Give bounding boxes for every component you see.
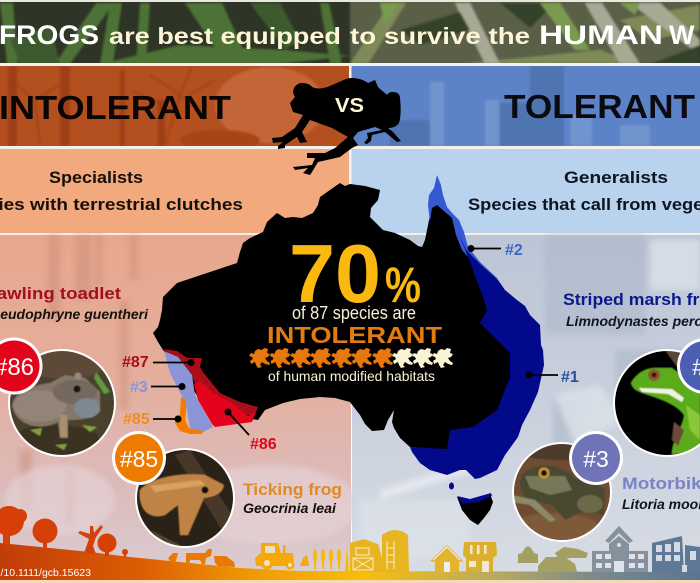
callouts: map labels left: #85 — [123, 411, 150, 428]
callouts: map labels right: #2 — [505, 242, 523, 259]
photo: crawling toadlet — [8, 349, 116, 457]
heading: tolerant: TOLERANT — [504, 88, 695, 125]
map: Tasmania — [457, 494, 493, 525]
landscape strip: land use gradient — [0, 506, 700, 583]
panel: generalists — [351, 149, 700, 233]
callouts: map labels left — [122, 354, 277, 453]
text: striped marsh frog — [563, 290, 700, 329]
map: south-west range 86 — [194, 381, 256, 427]
photo: ticking frog — [135, 448, 235, 550]
map: south-west range 85 — [175, 397, 203, 434]
panel: specialists — [0, 149, 349, 233]
icons: house and shop — [430, 542, 497, 572]
text: specialists description: Specialists — [49, 168, 143, 187]
title: HUMAN — [539, 20, 663, 50]
stat: 70 percent: 70 — [289, 227, 381, 320]
title: W — [669, 20, 695, 50]
text: generalists description — [468, 168, 700, 214]
panel: intolerant habitat background — [0, 235, 360, 583]
heading: intolerant: INTOLERANT — [0, 89, 231, 126]
icon: frog silhouette vs — [272, 78, 401, 175]
text: of 87 species are: of 87 species are — [292, 303, 416, 323]
map: generalist range light blue — [428, 175, 498, 281]
panel: tolerant habitat background — [352, 235, 700, 583]
text: crawling toadlet — [0, 284, 149, 322]
badge: rank 3 — [569, 431, 623, 485]
icons: wheat field — [313, 546, 349, 571]
text: specialists description — [0, 168, 243, 214]
photo: motorbike frog — [510, 440, 612, 543]
icons: tractor — [255, 543, 309, 570]
map: south-west range 87 — [163, 349, 258, 415]
text: vs: VS — [335, 95, 364, 117]
map: south-west range 3 — [164, 351, 213, 432]
map: range of species 1 dark blue — [410, 232, 544, 479]
title: FROGS — [0, 20, 99, 50]
badge: rank 3: #3 — [583, 446, 609, 472]
title: to survive the — [350, 23, 530, 49]
callouts: map labels left: #86 — [250, 436, 277, 453]
icons: vehicles — [518, 546, 588, 572]
text: intolerant orange: INTOLERANT — [267, 322, 442, 348]
badge: rank 85: #85 — [120, 446, 158, 472]
photo: striped marsh frog — [610, 348, 700, 458]
icons: frog pictogram row — [249, 348, 453, 368]
text: ticking frog — [243, 480, 342, 516]
text: of human modified habitats: of human modified habitats — [268, 368, 435, 384]
title: are best equipped — [109, 23, 341, 49]
badge: rank 86 — [0, 338, 42, 394]
icons: farm animals — [168, 549, 235, 567]
stat: 70 percent — [249, 227, 453, 384]
callouts: map labels left: #3 — [130, 379, 148, 396]
text: ticking frog: Geocrinia leai — [243, 500, 337, 516]
icons: trees — [0, 506, 128, 558]
callouts: map labels right: #1 — [561, 369, 579, 386]
icons: school building — [592, 526, 648, 572]
stat: 70 percent: % — [385, 257, 421, 313]
text: motorbike frog — [622, 474, 700, 512]
text: generalists description: Generalists — [564, 168, 668, 187]
icons: barn and silo — [350, 530, 409, 572]
callouts: map labels right — [468, 242, 579, 386]
badge: rank 1 — [677, 338, 700, 394]
panel: tolerant banner — [351, 66, 700, 146]
badge: rank 85 — [112, 431, 166, 485]
title — [0, 20, 695, 50]
text: ticking frog: Ticking frog — [243, 480, 342, 499]
map: Australia — [153, 175, 544, 525]
icons: apartments — [652, 536, 700, 572]
header photo: reeds background — [0, 0, 700, 64]
callouts: map labels left: #87 — [122, 354, 149, 371]
panel: intolerant banner — [0, 66, 349, 150]
